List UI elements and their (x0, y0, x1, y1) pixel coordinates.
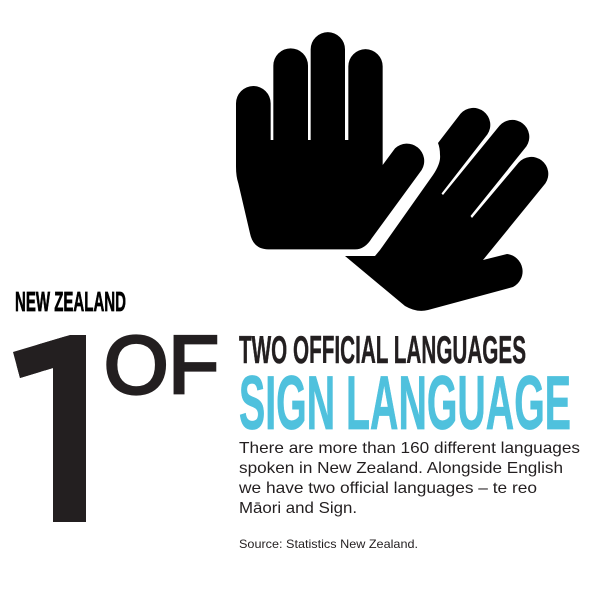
body text: Māori and Sign. (239, 500, 357, 517)
label: OF: OF (104, 320, 219, 411)
body text (238, 440, 580, 517)
big number 1: 1 (3, 279, 103, 580)
body text: we have two official languages – te reo (238, 480, 537, 497)
heading: New Zealand: NEW ZEALAND (15, 286, 126, 317)
source note: Source: Statistics New Zealand. (239, 537, 418, 551)
icon: left hand (236, 32, 424, 249)
body text: There are more than 160 different languages (239, 440, 580, 457)
body text: spoken in New Zealand. Alongside English (239, 460, 563, 477)
icon: right hand (345, 108, 548, 311)
icon: two hands (236, 32, 548, 311)
